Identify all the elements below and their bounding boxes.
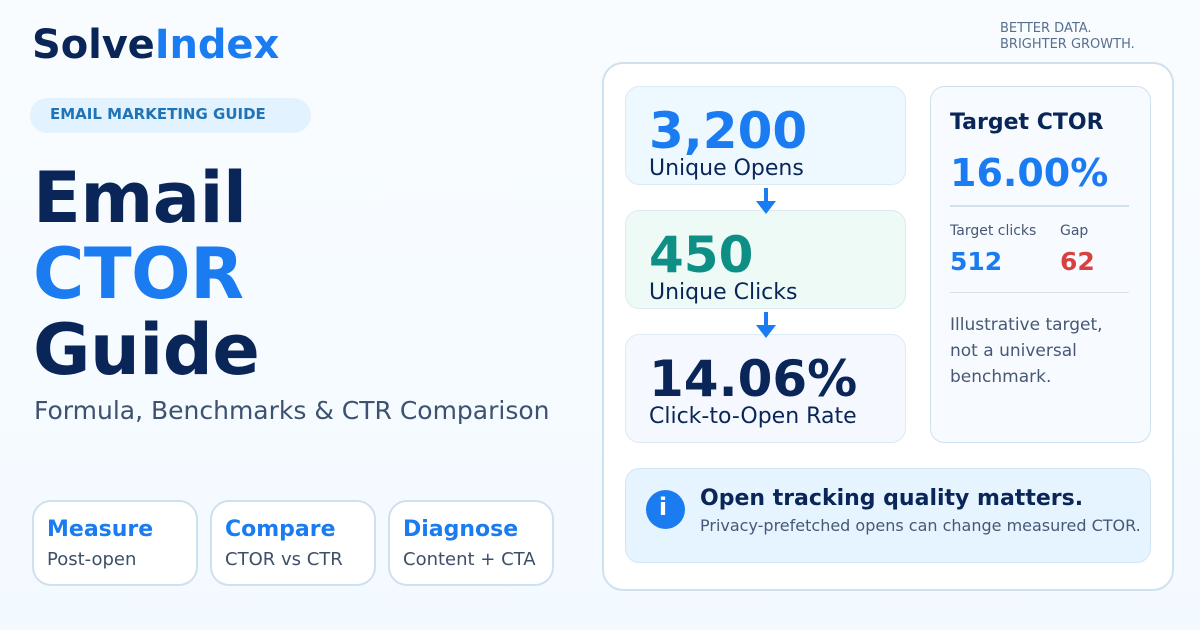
badge: email marketing guide: EMAIL MARKETING GUIDE (50, 105, 266, 123)
stat: unique clicks: Unique Clicks (649, 280, 797, 305)
stat: unique opens: 3,200 (649, 102, 807, 160)
title: Email (33, 157, 246, 239)
callout: open tracking (626, 468, 1150, 562)
icon: info (646, 490, 685, 529)
card: compare: Compare (225, 517, 336, 542)
callout: open tracking: Open tracking quality matters. (700, 486, 1083, 511)
logo: SolveIndex: SolveIndex (32, 22, 279, 68)
card: diagnose (389, 501, 553, 585)
metric: target clicks (949, 223, 1036, 276)
arrow: opens to clicks (756, 188, 776, 214)
note: illustrative target: benchmark. (950, 367, 1051, 387)
metric: gap: Gap (1060, 223, 1088, 239)
stat: unique opens (626, 86, 906, 184)
stat: click-to-open rate: 14.06% (649, 350, 857, 408)
panel: main calculation (603, 63, 1173, 590)
panel: target CTOR (930, 86, 1150, 442)
card: diagnose: Content + CTA (403, 549, 536, 570)
stat: click-to-open rate (626, 334, 906, 442)
tagline (1000, 21, 1135, 52)
card: measure: Measure (47, 517, 153, 542)
stat: unique clicks: 450 (649, 226, 753, 284)
note: illustrative target: Illustrative target, (950, 315, 1103, 335)
badge: email marketing guide (30, 98, 311, 133)
title: CTOR (33, 233, 244, 315)
heading: target CTOR: Target CTOR (950, 110, 1104, 135)
card: compare: CTOR vs CTR (225, 549, 343, 570)
card: diagnose: Diagnose (403, 517, 518, 542)
note: illustrative target: not a universal (950, 341, 1077, 361)
callout: open tracking: Privacy-prefetched opens can change measured CTOR. (700, 516, 1141, 535)
icon: info: i (659, 493, 667, 521)
stat: unique opens: Unique Opens (649, 156, 804, 181)
metric: gap (1060, 223, 1095, 276)
metric: gap: 62 (1060, 247, 1095, 276)
note: illustrative target (950, 315, 1103, 387)
value: 16.00%: 16.00% (950, 151, 1108, 195)
arrow: clicks to rate (756, 312, 776, 338)
title: Guide (33, 309, 259, 391)
card: measure: Post-open (47, 549, 136, 570)
metric: target clicks: Target clicks (949, 223, 1036, 239)
tagline: BRIGHTER GROWTH. (1000, 37, 1135, 52)
metric: target clicks: 512 (950, 247, 1002, 276)
stat: click-to-open rate: Click-to-Open Rate (649, 404, 857, 429)
card: compare (211, 501, 375, 585)
card: measure (33, 501, 197, 585)
title (33, 157, 259, 391)
stat: unique clicks (626, 210, 906, 308)
subtitle: Formula, Benchmarks & CTR Comparison (34, 396, 550, 425)
tagline: BETTER DATA. (1000, 21, 1092, 36)
